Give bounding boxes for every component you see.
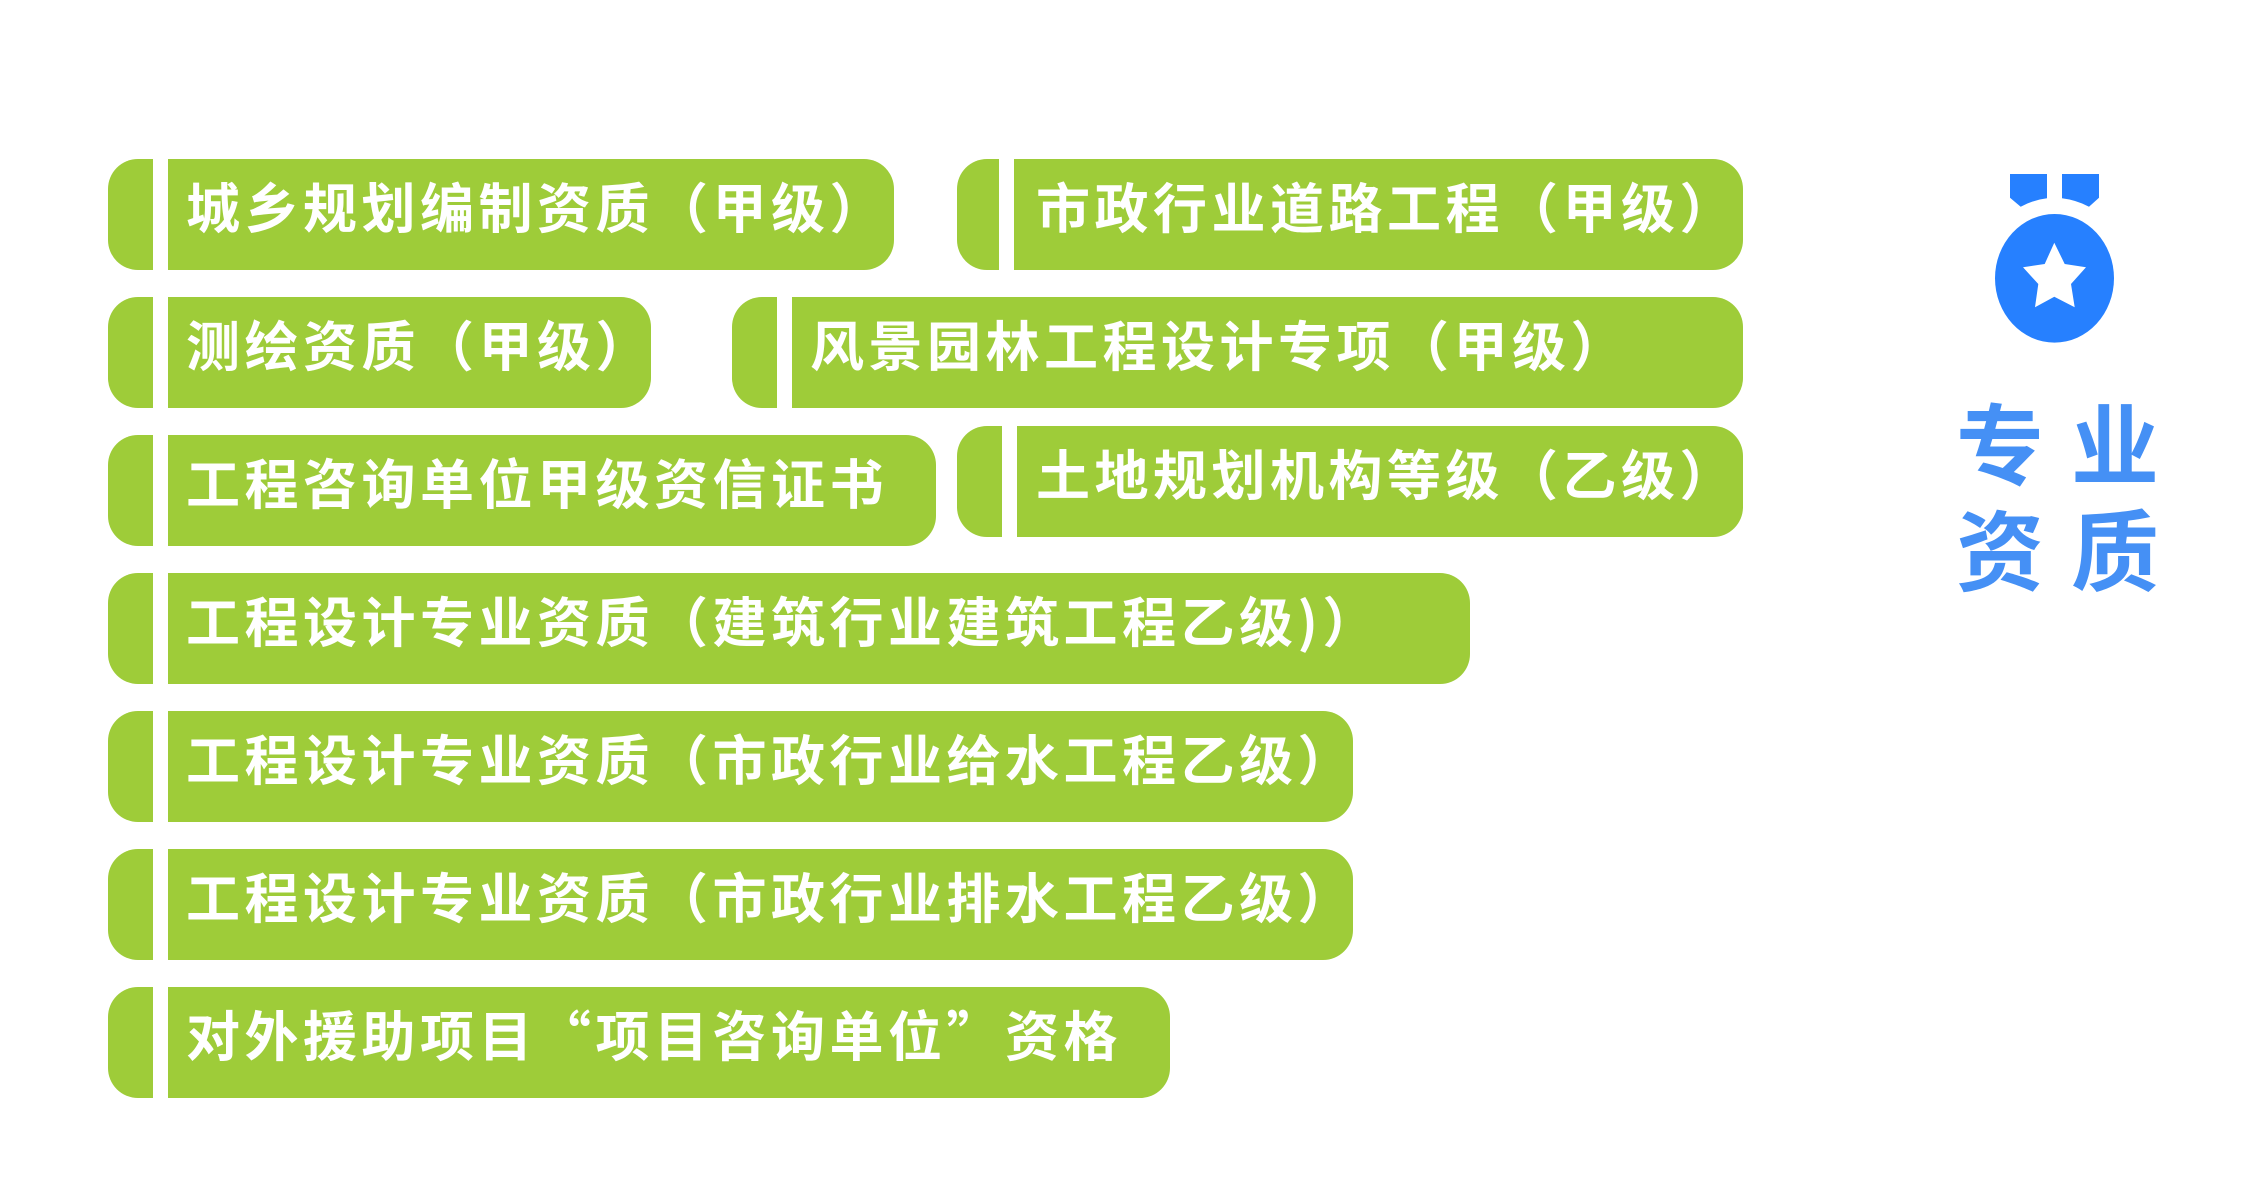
heading: 专业资质: 资质 bbox=[1956, 483, 2186, 610]
bar: 市政行业道路工程（甲级）: 市政行业道路工程（甲级） bbox=[1036, 165, 1738, 244]
bar: 工程咨询单位甲级资信证书: 工程咨询单位甲级资信证书 bbox=[186, 441, 888, 520]
bar: 土地规划机构等级（乙级） bbox=[957, 426, 1743, 537]
bar: 测绘资质（甲级）: 测绘资质（甲级） bbox=[186, 303, 654, 382]
bar: 工程设计专业资质（建筑行业建筑工程乙级)）: 工程设计专业资质（建筑行业建筑工程乙级)） bbox=[186, 579, 1381, 658]
bar: 工程设计专业资质（建筑行业建筑工程乙级)） bbox=[108, 573, 1470, 684]
heading: 专业资质 bbox=[1956, 377, 2186, 610]
bar: 城乡规划编制资质（甲级） bbox=[108, 159, 894, 270]
bar: 城乡规划编制资质（甲级）: 城乡规划编制资质（甲级） bbox=[186, 165, 888, 244]
bar: 土地规划机构等级（乙级）: 土地规划机构等级（乙级） bbox=[1036, 432, 1738, 511]
bar: 工程设计专业资质（市政行业排水工程乙级） bbox=[108, 849, 1356, 960]
bar: 对外援助项目“项目咨询单位”资格 bbox=[108, 987, 1170, 1098]
bar: 工程咨询单位甲级资信证书 bbox=[108, 435, 936, 546]
bar: 测绘资质（甲级） bbox=[108, 297, 654, 408]
bar: 工程设计专业资质（市政行业给水工程乙级） bbox=[108, 711, 1356, 822]
bar: 工程设计专业资质（市政行业给水工程乙级）: 工程设计专业资质（市政行业给水工程乙级） bbox=[186, 717, 1356, 796]
bar: 对外援助项目“项目咨询单位”资格: 对外援助项目“项目咨询单位”资格 bbox=[186, 993, 1122, 1072]
bar: 工程设计专业资质（市政行业排水工程乙级）: 工程设计专业资质（市政行业排水工程乙级） bbox=[186, 855, 1356, 934]
bar: 市政行业道路工程（甲级） bbox=[957, 159, 1743, 270]
icon: medal with star bbox=[1995, 174, 2114, 343]
bar: 风景园林工程设计专项（甲级） bbox=[732, 297, 1743, 408]
heading: 专业资质: 专业 bbox=[1956, 377, 2186, 504]
bar: 风景园林工程设计专项（甲级）: 风景园林工程设计专项（甲级） bbox=[810, 303, 1629, 382]
